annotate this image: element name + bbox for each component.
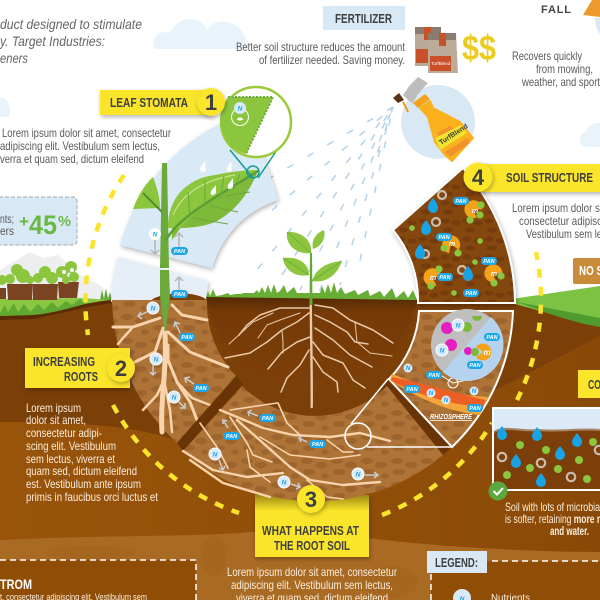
root soil number and title: THE ROOT SOIL [274,539,350,553]
band markers: PAN [469,406,482,412]
plant with leaves [133,161,258,268]
root soil text: Lorem ipsum dolor sit amet, consectetur [227,565,397,579]
left landscape with pots [0,252,112,320]
microbe labels: m [449,241,455,248]
fall heading: FALL [541,4,573,16]
right landscape hill [505,286,600,327]
leaf stomata text: adipiscing elit. Vestibulum sem lectus, [0,139,160,153]
magnifier: leaf detail [221,87,291,178]
intro text: eners [0,50,28,66]
panel: bottom left box [0,560,196,600]
intro text [0,16,142,66]
rhizosphere magnifier: PAN [469,363,482,369]
sky PAN: PAN [174,292,186,298]
leaf stomata text: Lorem ipsum dolor sit amet, consectetur [2,126,171,140]
fertilizer text [236,40,406,67]
PAN labels: PAN [465,291,478,297]
PAN pills [436,197,497,297]
root soil number and title [262,485,359,553]
rhizosphere magnifier: N [456,322,461,330]
band markers: N [406,365,411,372]
PAN labels: PAN [455,199,468,205]
tag: increasing roots: INCREASING [33,355,95,369]
root markers [138,302,209,408]
tag: soil structure: 4 [472,165,485,190]
icon: fall leaf [583,0,600,34]
panel: legend: LEGEND: [435,556,478,570]
increasing roots text [26,401,159,504]
panel: leaf sector [120,112,278,268]
root soil markers [209,410,378,489]
plus 45 percent callout [0,197,77,245]
icon: check badge [488,482,508,500]
microbe labels [430,208,497,282]
increasing roots text: scing elit. Vestibulum [26,439,116,453]
increasing roots text: sem lectus, viverra et [26,452,116,466]
plus 45 percent callout: ers [0,224,14,238]
root soil number and title: 3 [305,487,317,512]
PAN labels [438,199,496,297]
PAN labels: PAN [439,275,452,281]
plus 45 percent callout: nts; [0,212,14,226]
tag: increasing roots: 2 [115,356,127,381]
microbe labels: m [472,208,478,215]
drops [497,426,582,487]
fertilizer heading: FERTILIZER [335,12,392,26]
microbe labels: m [430,275,436,282]
soil structure text [512,201,600,241]
inner white sky half disk [204,193,418,300]
icon: fertilizer bags: TurfBlend [431,61,451,66]
panel: root soil sector [177,376,452,501]
root soil text: adipiscing elit. Vestibulum sem lectus, [231,578,393,592]
tag: compaction [578,370,600,398]
PAN labels: PAN [438,235,451,241]
panel: rhizosphere [389,309,513,447]
rhizosphere band [390,374,488,415]
panel: soil structure sector [393,168,515,303]
increasing roots text: est. Vestibulum ante ipsum [26,477,141,491]
intro text: duct designed to stimulate [0,16,142,32]
increasing roots text: primis in faucibus orci luctus et [26,490,159,504]
root soil markers: N [282,480,287,486]
root soil roots [183,403,390,499]
arrows nutrient and PAN: PAN [174,249,186,255]
root soil text [227,565,397,600]
tag: increasing roots: ROOTS [64,370,98,384]
rhizosphere magnifier [431,309,504,388]
rhizosphere label: RHIZOSPHERE [430,412,473,421]
fertilizer heading [323,6,405,30]
green dots [503,438,597,483]
band markers: PAN [428,373,441,379]
panel: center soil circle with seedling [206,230,417,407]
band markers: N [444,397,449,404]
dashed path circle [85,175,541,515]
rhizosphere magnifier: N [440,348,445,354]
increasing roots text: consectetur adipi- [26,426,102,440]
band markers: N [472,388,477,395]
seedling [283,230,342,305]
soil sample text [505,500,600,538]
root soil markers: N [213,452,218,458]
microbe labels: m [491,271,497,278]
root soil markers: N [356,472,361,478]
intro text: y. Target Industries: [0,33,105,49]
increasing roots text: quam sed, dictum eleifend [26,464,137,478]
band markers: N [429,390,434,397]
tag: soil structure [464,162,600,192]
zoom outline [345,379,452,449]
icon: spray bottle: TurfBlend [438,123,469,147]
increasing roots text: Lorem ipsum [26,401,81,415]
sky PAN [171,277,188,298]
roots [113,305,228,432]
rings [498,446,600,481]
rhizosphere magnifier: PAN [486,335,499,341]
tag: increasing roots [25,348,135,388]
spray mist [255,107,393,295]
icon: dollar signs: $$ [462,29,496,68]
panel: soil sample [493,408,600,490]
icon: spray bottle [393,77,475,161]
arrows nutrient and PAN: N [153,232,158,238]
leaf stomata text: verra et quam sed, dictum eleifend [0,152,144,166]
root markers: PAN [181,335,194,341]
rhizosphere magnifier: m [483,348,491,357]
central roots [225,301,393,407]
plus 45 percent callout: 45 [29,210,57,240]
water drops [415,198,473,281]
soil layers background [0,300,600,600]
root markers: N [151,306,156,312]
sign: no [573,258,600,284]
arrows nutrient and PAN [149,228,188,255]
root soil markers: PAN [312,442,324,448]
tag: leaf stomata: LEAF STOMATA [110,96,188,110]
root soil number and title: WHAT HAPPENS AT [262,524,359,538]
tag: leaf stomata [100,88,225,116]
green nutrients [409,201,505,296]
fertilizer text: of fertilizer needed. Saving money. [259,53,405,67]
root markers: N [172,394,177,402]
leaf stomata text [0,126,171,166]
root soil markers: PAN [226,434,238,440]
icon: fertilizer bags [415,27,458,73]
panel: increasing roots sector [111,257,236,443]
band markers [404,364,483,412]
root markers: PAN [195,386,208,392]
background clouds [0,19,600,147]
recovery text [512,49,600,89]
tag: leaf stomata: 1 [205,90,217,115]
fertilizer text: Better soil structure reduces the amount [236,40,406,54]
PAN labels: PAN [483,259,496,265]
band markers: PAN [406,387,419,393]
soil rings [421,191,466,274]
panel: legend [427,551,600,600]
tag background: root soil [255,495,369,557]
plus 45 percent callout: + [19,212,29,231]
plus 45 percent callout: % [58,213,71,230]
root markers: N [154,356,159,364]
magnifier: leaf detail: N [238,106,243,112]
recovery text: Recovers quickly [512,49,582,63]
increasing roots text: dolor sit amet, [26,413,86,427]
panel: bottom left box: TROM [0,576,32,592]
root soil markers: PAN [262,416,274,422]
microbes [420,197,505,289]
